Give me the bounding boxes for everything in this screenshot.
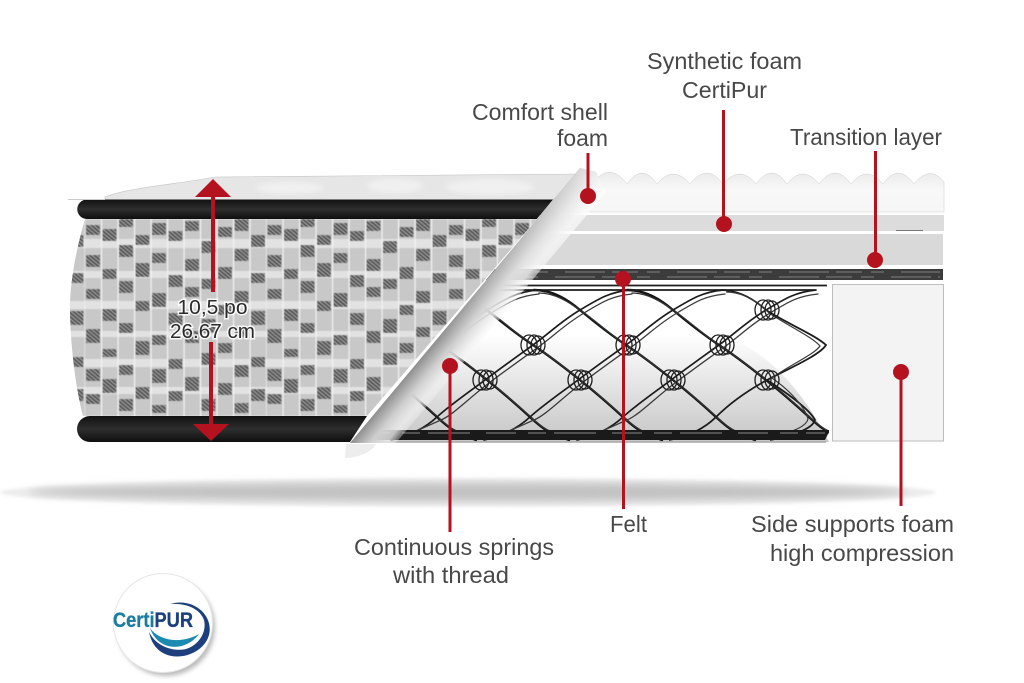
height label: 26.67 cm — [170, 321, 255, 343]
label: side supports foam — [751, 511, 954, 566]
logo swoosh — [149, 603, 210, 657]
fabric side panel — [60, 219, 560, 416]
label: comfort shell foam: Comfort shell — [472, 99, 608, 125]
mattress cover: quilted top, fabric side and black piping — [60, 174, 580, 442]
CertiPUR logo — [113, 574, 215, 676]
felt layer — [486, 269, 943, 280]
transition layer — [499, 234, 943, 265]
height arrows — [193, 179, 231, 441]
bottom piping band — [77, 416, 367, 442]
synthetic foam layer — [527, 215, 944, 231]
label: transition layer: Transition layer — [790, 124, 942, 150]
callout: side supports — [893, 364, 909, 506]
label: synthetic foam — [647, 48, 802, 103]
floor shadow — [0, 478, 936, 506]
label: side supports foam: Side supports foam — [751, 511, 954, 537]
label: continuous springs — [354, 534, 554, 588]
label: synthetic foam: CertiPur — [682, 77, 767, 103]
callout: synthetic foam — [716, 110, 732, 232]
callout: comfort shell foam — [580, 153, 596, 204]
label: continuous springs: with thread — [392, 562, 509, 588]
quilted top surface — [105, 174, 580, 200]
callout: felt — [615, 271, 631, 509]
callout: transition layer — [867, 151, 883, 268]
comfort shell foam layer — [543, 172, 944, 212]
callout lines and dots — [442, 110, 909, 532]
side support foam — [832, 284, 944, 441]
height label: 10,5 po — [178, 297, 248, 319]
label: comfort shell foam: foam — [557, 125, 608, 151]
fold of the cover — [345, 168, 606, 458]
label: comfort shell foam — [472, 99, 608, 151]
logo wordmark: CertiPUR — [113, 609, 193, 632]
label: continuous springs: Continuous springs — [354, 534, 554, 560]
callout: continuous springs — [442, 358, 458, 532]
label: felt: Felt — [610, 511, 648, 537]
label: synthetic foam: Synthetic foam — [647, 48, 802, 74]
continuous springs — [376, 284, 829, 443]
height label — [170, 297, 255, 343]
label: side supports foam: high compression — [770, 540, 954, 566]
top piping band — [77, 200, 553, 219]
